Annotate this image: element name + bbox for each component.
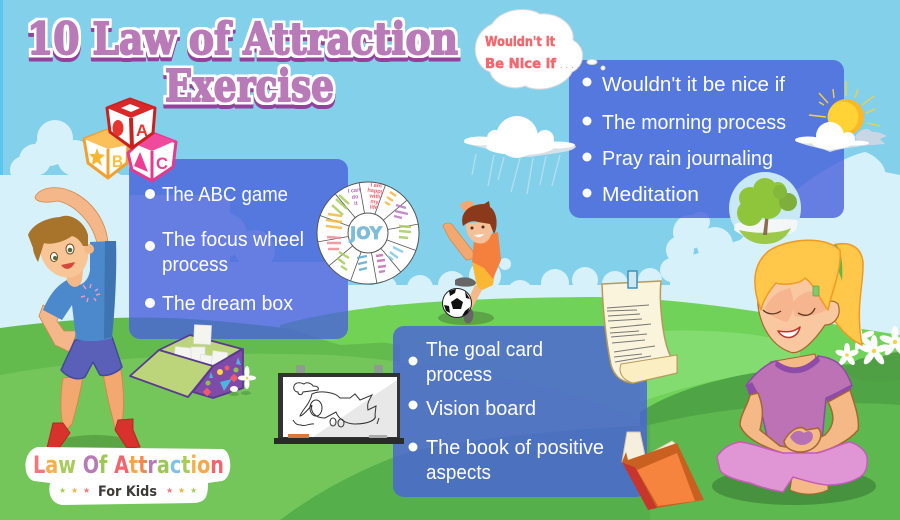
icon: paper scroll note bbox=[602, 271, 677, 383]
thought bubble: . . . . bbox=[560, 60, 579, 71]
focus wheel bbox=[317, 182, 419, 284]
panel: ABC game list: The ABC game bbox=[162, 184, 288, 206]
thought bubble: Be Nice if bbox=[485, 56, 556, 72]
icon: orange book bbox=[622, 432, 704, 510]
logo: Law Of Attraction For Kids: ★ bbox=[59, 486, 66, 495]
logo: Law Of Attraction For Kids: Law Of Attraction bbox=[33, 451, 224, 479]
focus wheel: life bbox=[370, 205, 378, 211]
logo: Law Of Attraction For Kids: ★ bbox=[83, 486, 90, 495]
character: meditating girl bbox=[712, 240, 876, 505]
panel: morning list: The morning process bbox=[602, 112, 786, 134]
icon: toy blocks ABC bbox=[84, 99, 176, 181]
panel: morning list bbox=[569, 60, 844, 218]
decoration: flowers and bush bbox=[835, 323, 900, 382]
title bbox=[27, 14, 458, 112]
panel: ABC game list: process bbox=[162, 254, 228, 276]
character: stretching boy bbox=[28, 188, 140, 459]
panel: goal card list bbox=[393, 326, 647, 497]
icon: dream box bbox=[130, 325, 256, 398]
logo: Law Of Attraction For Kids: ★ bbox=[178, 486, 185, 495]
logo: Law Of Attraction For Kids: For Kids bbox=[98, 484, 157, 500]
logo: Law Of Attraction For Kids: ★ bbox=[71, 486, 78, 495]
focus wheel: do bbox=[351, 194, 359, 201]
icon: whiteboard with airplane drawing bbox=[274, 365, 404, 444]
focus wheel: I can bbox=[347, 187, 361, 195]
panel: goal card list: aspects bbox=[426, 462, 491, 484]
title: Exercise bbox=[165, 61, 334, 112]
panel: ABC game list: The focus wheel bbox=[162, 229, 304, 251]
panel: morning list: Wouldn't it be nice if bbox=[602, 74, 785, 96]
block: orange B: B bbox=[112, 152, 123, 171]
panel: goal card list: The book of positive bbox=[426, 437, 604, 459]
focus wheel: my bbox=[370, 199, 380, 206]
logo: Law Of Attraction For Kids bbox=[25, 447, 230, 505]
icon: tree in circle bbox=[729, 172, 801, 244]
thought bubble: Wouldn't it bbox=[485, 35, 555, 50]
character: soccer boy with ball bbox=[438, 201, 501, 325]
focus wheel: JOY bbox=[349, 224, 383, 244]
panel: morning list: Meditation bbox=[602, 184, 699, 206]
icon: rain cloud bbox=[464, 116, 576, 194]
block: pink C: C bbox=[156, 154, 168, 173]
logo: Law Of Attraction For Kids: ★ bbox=[190, 486, 197, 495]
panel: morning list: Pray rain journaling bbox=[602, 148, 773, 170]
logo: Law Of Attraction For Kids: ★ bbox=[166, 486, 173, 495]
title: 10 Law of Attraction bbox=[27, 14, 458, 65]
focus wheel: happy bbox=[367, 188, 385, 195]
focus wheel: I am bbox=[370, 182, 382, 190]
panel: goal card list: Vision board bbox=[426, 398, 536, 420]
panel: ABC game list bbox=[129, 159, 348, 339]
icon: sun behind cloud bbox=[795, 81, 887, 152]
focus wheel: it bbox=[354, 201, 358, 207]
focus wheel: with bbox=[368, 193, 381, 201]
panel: goal card list: The goal card bbox=[426, 339, 543, 361]
thought bubble bbox=[475, 9, 605, 89]
panel: ABC game list: The dream box bbox=[162, 293, 293, 315]
block: red A: A bbox=[136, 121, 148, 140]
panel: goal card list: process bbox=[426, 364, 492, 386]
